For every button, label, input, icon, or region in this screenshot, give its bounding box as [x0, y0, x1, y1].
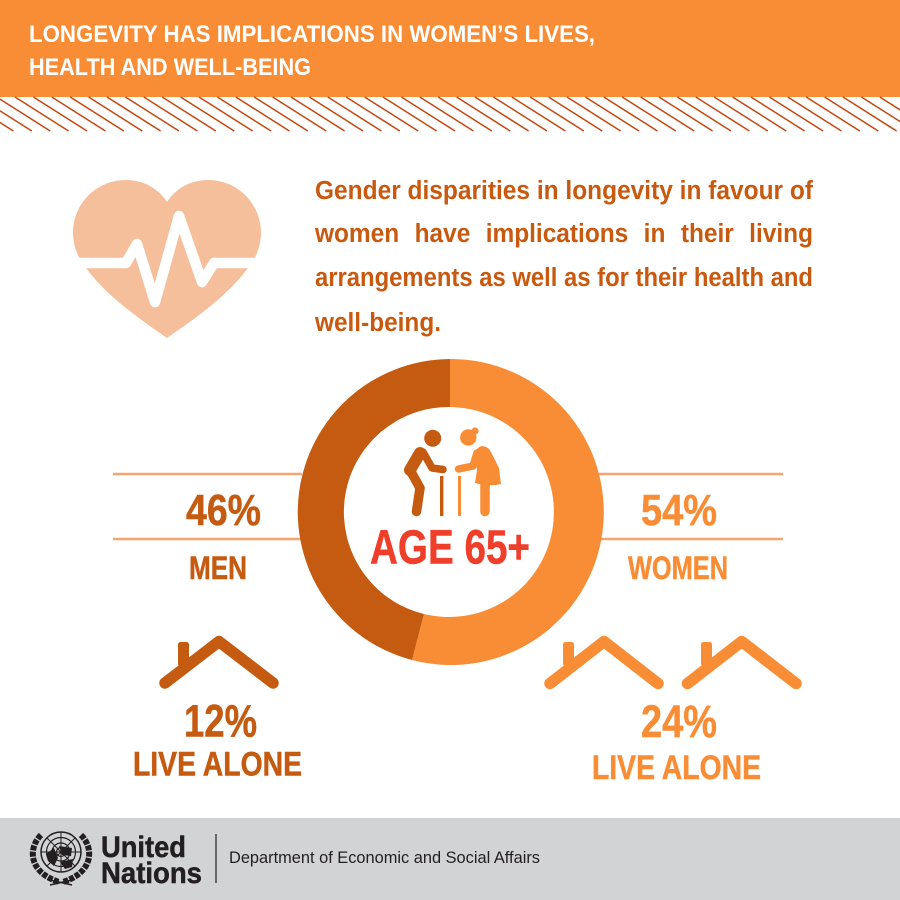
women share	[628, 486, 728, 586]
hatched strip	[0, 97, 900, 131]
men divider lines	[113, 474, 302, 539]
men share: 46%	[186, 486, 261, 535]
title	[29, 21, 595, 81]
header band	[0, 0, 900, 97]
UN wordmark: Nations	[101, 857, 202, 890]
UN wordmark: United	[101, 831, 186, 864]
icon: house women 2	[688, 642, 796, 684]
icon: house women 1	[550, 642, 658, 684]
icon: house men	[165, 642, 273, 683]
men share	[186, 486, 261, 586]
women share: 54%	[641, 486, 717, 535]
men live alone: LIVE ALONE	[133, 746, 302, 784]
age label: AGE 65+	[370, 522, 530, 574]
intro text: well-being.	[314, 309, 441, 337]
women live alone	[592, 696, 761, 787]
man	[410, 430, 443, 516]
intro text	[314, 177, 813, 337]
men live alone: 12%	[184, 696, 257, 746]
icon: elderly couple	[410, 427, 501, 516]
woman	[458, 427, 501, 516]
icon: UN emblem	[33, 832, 89, 885]
icon: heart with pulse	[68, 180, 266, 338]
title: LONGEVITY HAS IMPLICATIONS IN WOMEN’S LIVES,	[29, 21, 595, 48]
title: HEALTH AND WELL-BEING	[29, 54, 311, 81]
women divider lines	[598, 474, 783, 539]
donut chart	[298, 359, 604, 665]
women live alone: 24%	[641, 696, 717, 747]
intro text: women have implications in their living	[314, 220, 813, 248]
intro text: arrangements as well as for their health and	[315, 264, 813, 292]
women share: WOMEN	[628, 550, 728, 586]
men live alone	[133, 696, 302, 784]
women live alone: LIVE ALONE	[592, 749, 761, 787]
UN wordmark	[101, 831, 202, 890]
department name: Department of Economic and Social Affairs	[229, 848, 540, 867]
men share: MEN	[189, 550, 247, 586]
intro text: Gender disparities in longevity in favour of	[315, 177, 813, 205]
footer band	[0, 818, 900, 900]
